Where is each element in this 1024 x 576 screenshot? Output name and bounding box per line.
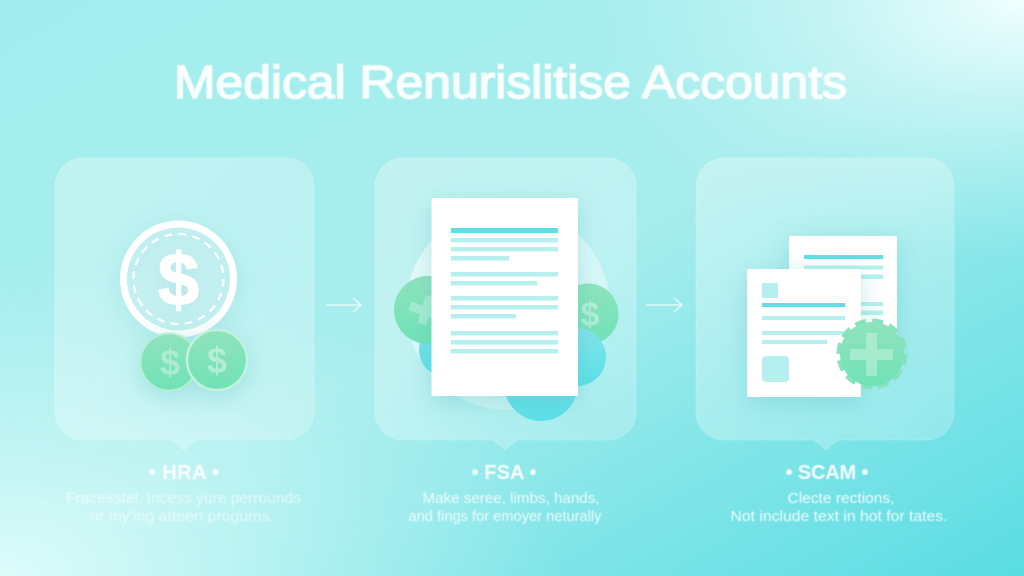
icon: document xyxy=(432,198,578,396)
description: FSA: Make seree, limbs, hands, xyxy=(422,491,600,507)
description: SCAM: Clecte rections, xyxy=(788,491,894,507)
panel: FSA xyxy=(375,158,636,450)
description: HRA: Fracesstel, Incess yure perrounds xyxy=(66,491,301,507)
icon: large dollar coin: $ xyxy=(158,238,199,321)
icon: green plus bubble xyxy=(394,276,462,344)
description: SCAM: Not include text in hot for tates. xyxy=(730,509,948,525)
label: SCAM: • SCAM • xyxy=(786,462,868,484)
description: FSA xyxy=(408,491,602,525)
title: Medical Renurislitise Accounts xyxy=(174,56,847,108)
icon: small green coins: $ xyxy=(207,340,227,381)
description: SCAM xyxy=(730,491,948,525)
label: FSA: • FSA • xyxy=(472,462,536,484)
icon: green gear with plus xyxy=(838,320,906,388)
description: HRA: or my'ing atteen progums. xyxy=(90,509,274,525)
arrow: HRA to FSA xyxy=(326,298,361,312)
description: FSA: and fings for emoyer neturally xyxy=(408,509,602,525)
arrow: FSA to SCAM xyxy=(646,298,682,312)
description: HRA xyxy=(66,491,301,525)
label: HRA: • HRA • xyxy=(149,462,219,484)
icon: green dollar bubble: $ xyxy=(581,296,600,334)
icon: green dollar bubble xyxy=(558,284,618,344)
icon: front document xyxy=(747,269,861,397)
icon: small green coins: $ xyxy=(160,342,180,383)
icon: large dollar coin xyxy=(124,224,234,334)
icon: back document xyxy=(789,236,897,361)
panel: HRA xyxy=(55,158,314,450)
icon: blue blobs xyxy=(419,323,578,421)
icon: small green coins xyxy=(140,330,247,390)
icon: halo circle xyxy=(406,206,610,410)
panel: SCAM xyxy=(696,158,954,450)
icon: blue bubble right xyxy=(548,328,606,386)
